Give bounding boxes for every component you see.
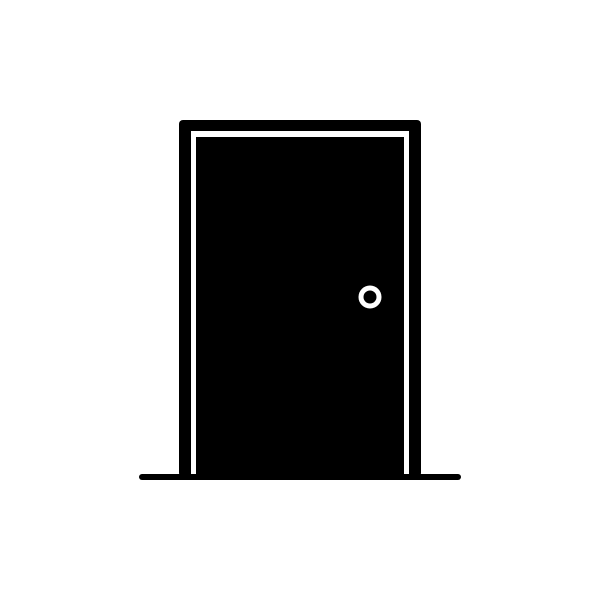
floor line <box>139 474 461 480</box>
door knob <box>361 288 379 306</box>
door frame <box>179 120 421 477</box>
